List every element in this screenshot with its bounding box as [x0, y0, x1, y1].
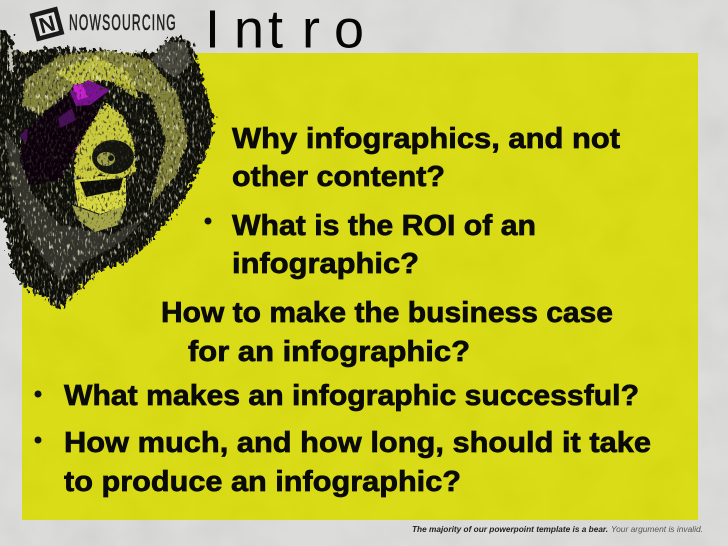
logo: NowSourcing: NOWSOURCING [69, 10, 176, 35]
bullet list: lower questions: How much, and how long, should it take [64, 427, 651, 459]
open mouth [74, 176, 126, 214]
title: Intro [205, 0, 364, 60]
text block: business case: How to make the business case [161, 297, 613, 329]
logo: NowSourcing: N [36, 10, 58, 39]
bullet list: lower questions: What makes an infographic successful? [64, 380, 639, 412]
footer caption: The majority of our powerpoint template is a bear. [412, 525, 608, 534]
bullet list: upper questions: Why infographics, and not [232, 123, 620, 155]
icon: bear head illustration [0, 20, 225, 320]
bullet list: lower questions: to produce an infographic? [64, 466, 461, 498]
snout [74, 103, 136, 180]
bear fur highlights [5, 42, 192, 280]
bullet list: upper questions: infographic? [232, 248, 419, 280]
bullet list: upper questions: What is the ROI of an [232, 210, 536, 242]
text block: business case [161, 297, 613, 368]
logo: NowSourcing [32, 9, 176, 40]
bullet list: upper questions: other content? [232, 161, 445, 193]
dark eye shadow [20, 82, 108, 185]
bullet list: upper questions [204, 123, 620, 280]
footer caption [412, 525, 703, 534]
magenta streak [20, 80, 110, 152]
footer caption: Your argument is invalid. [611, 525, 703, 534]
bullet list: lower questions [34, 380, 651, 498]
text block: business case: for an infographic? [188, 336, 470, 368]
ear highlight [8, 42, 14, 72]
panel: yellow content area [22, 53, 698, 520]
